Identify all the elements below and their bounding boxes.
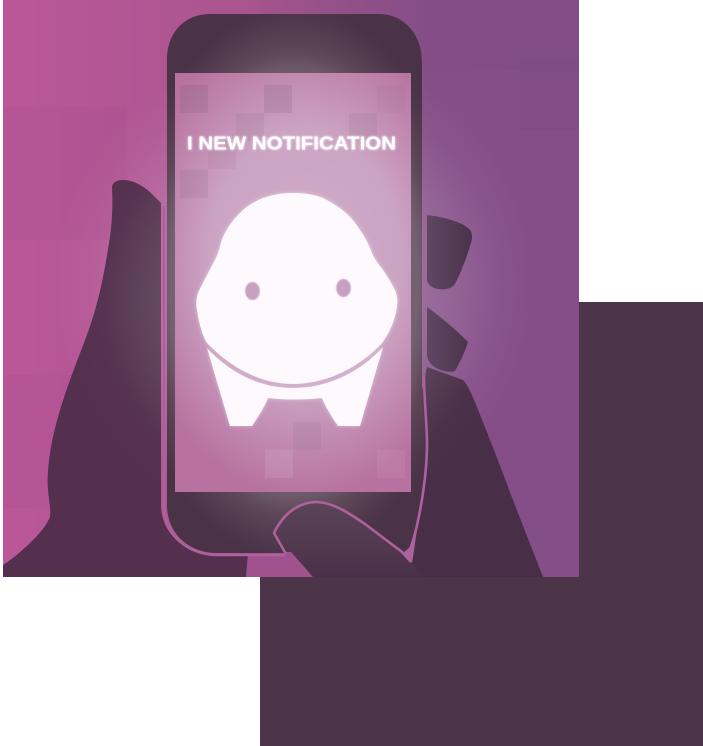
notification text: I NEW NOTIFICATION (187, 134, 396, 154)
light halo (96, 132, 494, 437)
character glow (196, 193, 397, 426)
phone screen (175, 73, 411, 492)
screen mosaic (180, 85, 377, 478)
fingernail: upper (427, 215, 472, 289)
character legs (207, 347, 383, 426)
notification text: I NEW NOTIFICATION (187, 134, 396, 154)
character head (196, 193, 397, 384)
gap between hand and thumb (246, 553, 250, 577)
phone outline (164, 206, 427, 555)
character (196, 193, 397, 426)
fingernail: lower (427, 307, 468, 372)
background panel (3, 0, 579, 577)
right eye (336, 279, 351, 297)
left hand (3, 180, 248, 577)
left eye (245, 282, 260, 300)
phone body (167, 14, 426, 553)
thumb (292, 504, 416, 577)
right hand (285, 367, 543, 577)
thumb outline (274, 502, 411, 562)
dark offset square (260, 302, 703, 746)
background mosaic (3, 0, 579, 508)
